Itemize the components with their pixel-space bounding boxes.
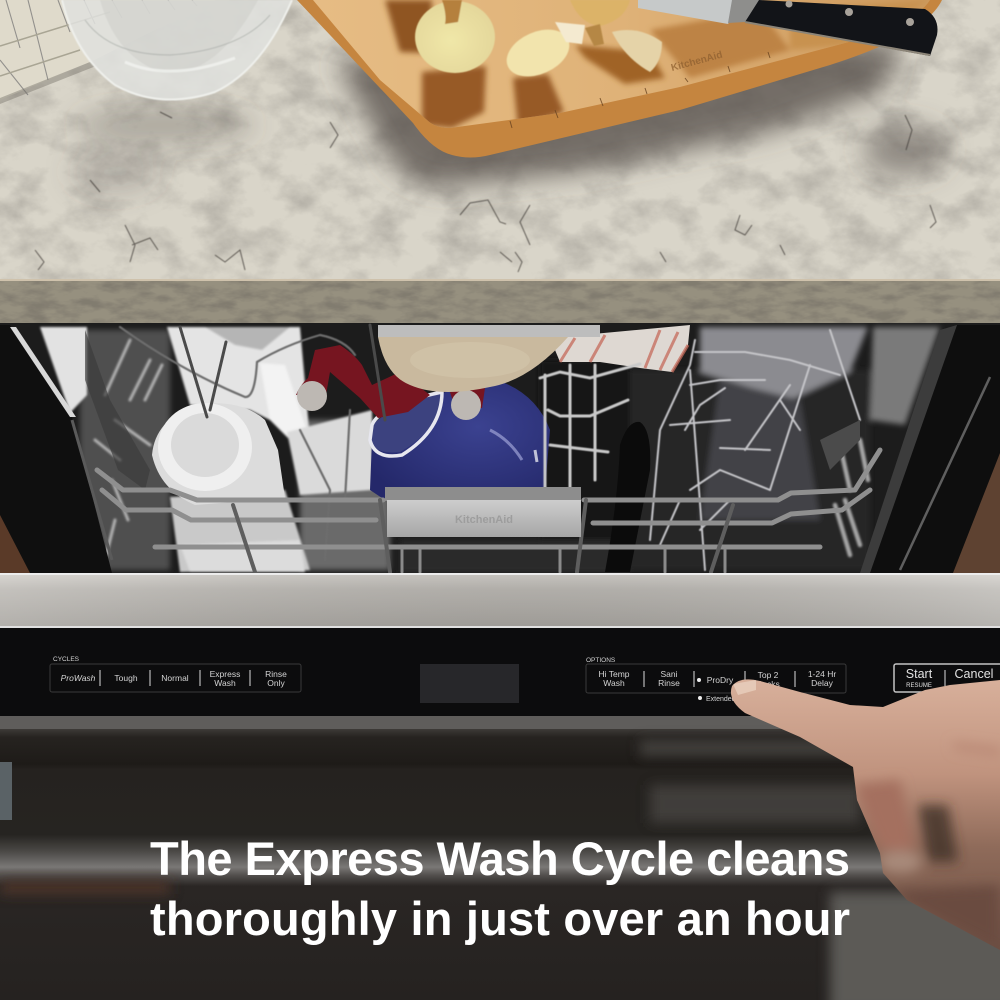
- options group: Extended: [706, 696, 736, 703]
- cycles group: [50, 656, 301, 692]
- left rack detail: [95, 340, 162, 560]
- beige bowl: [378, 337, 568, 392]
- glass highlights: [650, 330, 860, 570]
- panel: dishwasher interior: [0, 323, 1000, 573]
- caption: thoroughly in just over an hour: [150, 892, 850, 945]
- door frame left: [0, 325, 112, 573]
- cycles group: Tough: [114, 673, 138, 683]
- cycles group: CYCLES: [53, 656, 80, 663]
- options group: [586, 657, 846, 703]
- caption: [150, 832, 850, 945]
- door top strip: [0, 573, 1000, 628]
- towel: [0, 0, 216, 104]
- options group: Wash: [603, 678, 625, 688]
- rack wires: [97, 325, 880, 572]
- cycles group: ProWash: [61, 673, 96, 683]
- logo on board: KitchenAid: [670, 50, 724, 74]
- door frame right: [860, 325, 1000, 573]
- board body: [297, 0, 942, 158]
- white dishes left: [40, 327, 372, 572]
- rack handle: [385, 487, 581, 537]
- start and cancel buttons: RESUME: [906, 683, 932, 689]
- start and cancel buttons: Start: [906, 667, 933, 681]
- options group: Top 2: [758, 670, 779, 680]
- white mug: [152, 403, 285, 505]
- panel: countertop front edge: [0, 279, 1000, 324]
- cycles group: Only: [267, 678, 285, 688]
- options group: Racks: [756, 679, 780, 689]
- right rack bars: [835, 440, 868, 555]
- upper bar: [378, 325, 600, 337]
- left rack tines: [120, 327, 355, 560]
- cutting board: [297, 0, 942, 158]
- caption: The Express Wash Cycle cleans: [150, 832, 850, 885]
- cast shadows on counter: [70, 40, 947, 194]
- hand shading: [855, 742, 1000, 950]
- lower trim strip: [0, 716, 1000, 729]
- front rack rails: [97, 450, 880, 547]
- options group: Hi Temp: [598, 669, 630, 679]
- options group: Delay: [811, 678, 834, 688]
- panel: lower door: [0, 729, 1000, 1000]
- red utensil: [296, 345, 485, 420]
- onions and garlic: [415, 0, 662, 86]
- interior background tones: [80, 327, 940, 573]
- options group: ProDry: [707, 675, 734, 685]
- display window: [420, 664, 519, 703]
- options group: OPTIONS: [586, 657, 616, 664]
- panel: stone countertop: [0, 0, 1000, 282]
- cycles group: Express: [210, 669, 240, 679]
- cycles group: Rinse: [265, 669, 287, 679]
- dark tine: [180, 325, 385, 420]
- panel: control panel: [0, 628, 1000, 717]
- hand pressing the button: [731, 679, 1000, 950]
- options group: Sani: [660, 669, 678, 679]
- cycles group: Wash: [214, 678, 236, 688]
- board grain and shadows: [385, 0, 930, 128]
- countertop mottled texture: [0, 0, 1000, 282]
- chef knife: [638, 0, 938, 56]
- rack handle: KitchenAid: [455, 514, 513, 526]
- options group: 1-24 Hr: [808, 669, 836, 679]
- cycles group: Normal: [161, 673, 189, 683]
- glass bowl: [62, 0, 292, 100]
- marble veins: [35, 112, 936, 272]
- blue pitcher: [370, 378, 550, 500]
- ruler ticks: [510, 52, 770, 128]
- options group: Rinse: [658, 678, 680, 688]
- start and cancel buttons: [894, 664, 1000, 692]
- start and cancel buttons: Cancel: [955, 667, 993, 681]
- black silicone piece: [605, 422, 650, 572]
- stripes plate: [550, 325, 690, 372]
- center tines: [540, 364, 640, 490]
